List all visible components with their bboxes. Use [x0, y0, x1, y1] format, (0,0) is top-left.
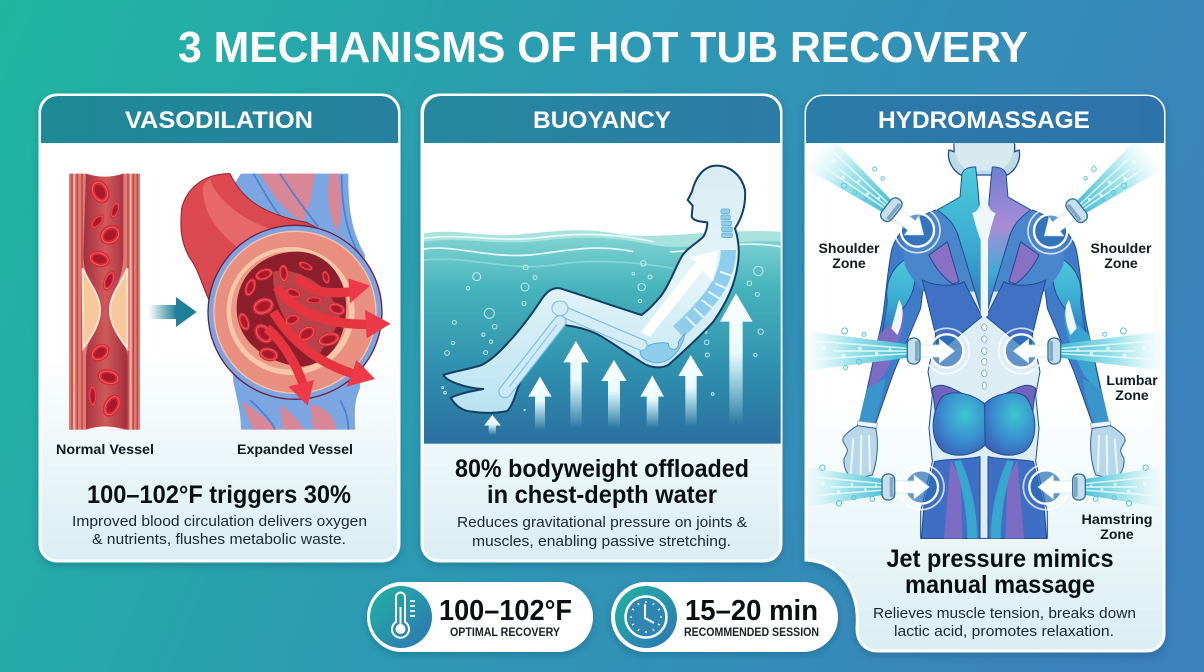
panel: buoyancy — [422, 95, 781, 561]
labels: zones: Zone — [1104, 255, 1138, 271]
icon: thermometer — [370, 586, 432, 648]
stat: hydromassage: manual massage — [905, 571, 1095, 599]
normal vessel — [69, 174, 140, 430]
heading: buoyancy — [424, 96, 780, 143]
heading: hydromassage — [806, 96, 1164, 143]
illustration: muscular back with jets — [803, 137, 1165, 538]
stat: vasodilation: 100–102°F triggers 30% — [87, 481, 351, 509]
label: expanded vessel: Expanded Vessel — [237, 441, 353, 457]
illustration: vessels — [69, 174, 391, 430]
pill: optimal recovery: OPTIMAL RECOVERY — [450, 627, 560, 639]
description: vasodilation: & nutrients, flushes metabolic waste. — [92, 531, 346, 548]
right arm — [1032, 210, 1125, 478]
stat: buoyancy: in chest-depth water — [487, 481, 717, 509]
labels: zones: Zone — [1115, 387, 1149, 403]
buoyancy arrows — [484, 293, 753, 435]
stat: hydromassage — [886, 545, 1114, 599]
pill: optimal recovery: 100–102°F — [439, 595, 572, 627]
expanded vessel — [181, 174, 391, 430]
pill: optimal recovery — [367, 582, 593, 652]
pill: recommended session: RECOMMENDED SESSION — [684, 627, 819, 639]
labels: zones — [818, 240, 1158, 542]
spray bubbles — [820, 167, 1148, 506]
labels: zones: Zone — [1100, 526, 1134, 542]
labels: zones: Shoulder — [1090, 240, 1152, 256]
arrow: normal to expanded — [148, 297, 197, 327]
labels: zones: Hamstring — [1082, 511, 1152, 527]
stat: buoyancy — [455, 455, 749, 509]
description: buoyancy — [457, 514, 747, 550]
spine and skeleton — [505, 209, 734, 392]
description: vasodilation — [72, 513, 367, 548]
panel: hydromassage — [803, 96, 1165, 651]
heading: vasodilation — [41, 96, 398, 143]
stat: hydromassage: Jet pressure mimics — [886, 545, 1114, 573]
red flow arrows — [267, 277, 391, 406]
left arm — [843, 210, 936, 478]
body silhouette — [443, 166, 745, 413]
labels: zones: Zone — [832, 255, 866, 271]
pill: recommended session: 15–20 min — [685, 595, 818, 627]
head and neck — [948, 143, 1020, 175]
water jets — [803, 137, 1165, 510]
description: buoyancy: Reduces gravitational pressure on joints & — [457, 514, 747, 531]
stat: buoyancy: 80% bodyweight offloaded — [455, 455, 749, 483]
vertebrae — [982, 324, 987, 389]
description: hydromassage: lactic acid, promotes relaxation. — [894, 623, 1114, 640]
heading: hydromassage: HYDROMASSAGE — [878, 107, 1090, 134]
back arrow — [641, 250, 718, 337]
labels: zones: Shoulder — [818, 240, 880, 256]
bubbles — [442, 261, 763, 411]
icon: clock — [615, 586, 677, 648]
description: hydromassage: Relieves muscle tension, breaks down — [873, 605, 1136, 622]
labels: zones: Lumbar — [1106, 372, 1158, 388]
pill: recommended session — [611, 582, 838, 652]
description: hydromassage — [873, 605, 1136, 640]
description: buoyancy: muscles, enabling passive stretching. — [472, 533, 731, 550]
water — [424, 230, 781, 444]
illustration: floating body — [424, 166, 781, 444]
label: normal vessel: Normal Vessel — [56, 441, 154, 457]
heading: vasodilation: VASODILATION — [125, 107, 313, 134]
description: vasodilation: Improved blood circulation delivers oxygen — [72, 513, 367, 530]
torso — [904, 167, 1064, 538]
heading: buoyancy: BUOYANCY — [533, 107, 671, 134]
panel: vasodilation — [40, 95, 399, 561]
title: 3 MECHANISMS OF HOT TUB RECOVERY — [178, 23, 1028, 72]
